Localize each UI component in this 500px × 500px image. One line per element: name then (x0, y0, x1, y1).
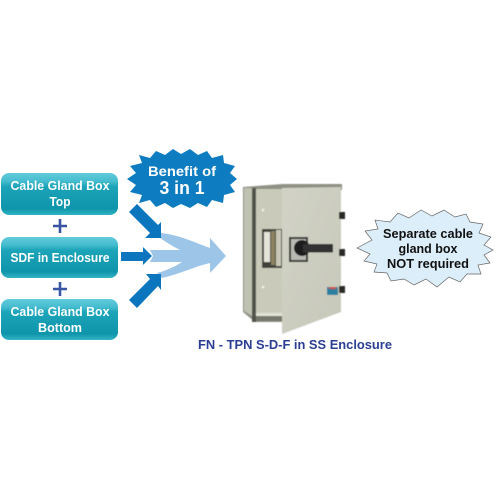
callout: Separate cable gland box NOT required: NOT required (387, 256, 469, 271)
box: SDF in Enclosure: SDF in Enclosure (10, 250, 110, 265)
badge: Benefit of 3 in 1: Benefit of (148, 163, 216, 179)
box: SDF in Enclosure (1, 237, 118, 278)
box: Cable Gland Box Top: Cable Gland Box (10, 178, 110, 193)
callout: Separate cable gland box NOT required (357, 210, 493, 287)
box: Cable Gland Box Bottom: Bottom (38, 320, 82, 335)
arrow: dark blue top (129, 204, 161, 238)
badge: Benefit of 3 in 1 (127, 149, 237, 208)
box: Cable Gland Box Bottom: Cable Gland Box (10, 304, 110, 319)
product: enclosure with open door (243, 184, 345, 334)
box: Cable Gland Box Bottom (1, 299, 118, 340)
box: Cable Gland Box Top (1, 173, 118, 215)
plus sign top (53, 219, 67, 233)
badge: Benefit of 3 in 1: 3 in 1 (160, 178, 204, 198)
callout: Separate cable gland box NOT required: gland box (398, 241, 458, 256)
hinges (339, 212, 345, 293)
arrow: dark blue middle (121, 247, 152, 265)
switch internals (262, 229, 282, 268)
box: Cable Gland Box Top: Top (50, 194, 71, 209)
callout: Separate cable gland box NOT required: Separate cable (383, 226, 473, 241)
caption: FN - TPN S-D-F in SS Enclosure (198, 337, 392, 352)
door handle (289, 237, 333, 262)
arrow: dark blue bottom (129, 274, 161, 308)
door label (327, 287, 338, 295)
arrow: light blue merged arrow (150, 233, 226, 278)
plus sign bottom (53, 282, 67, 296)
